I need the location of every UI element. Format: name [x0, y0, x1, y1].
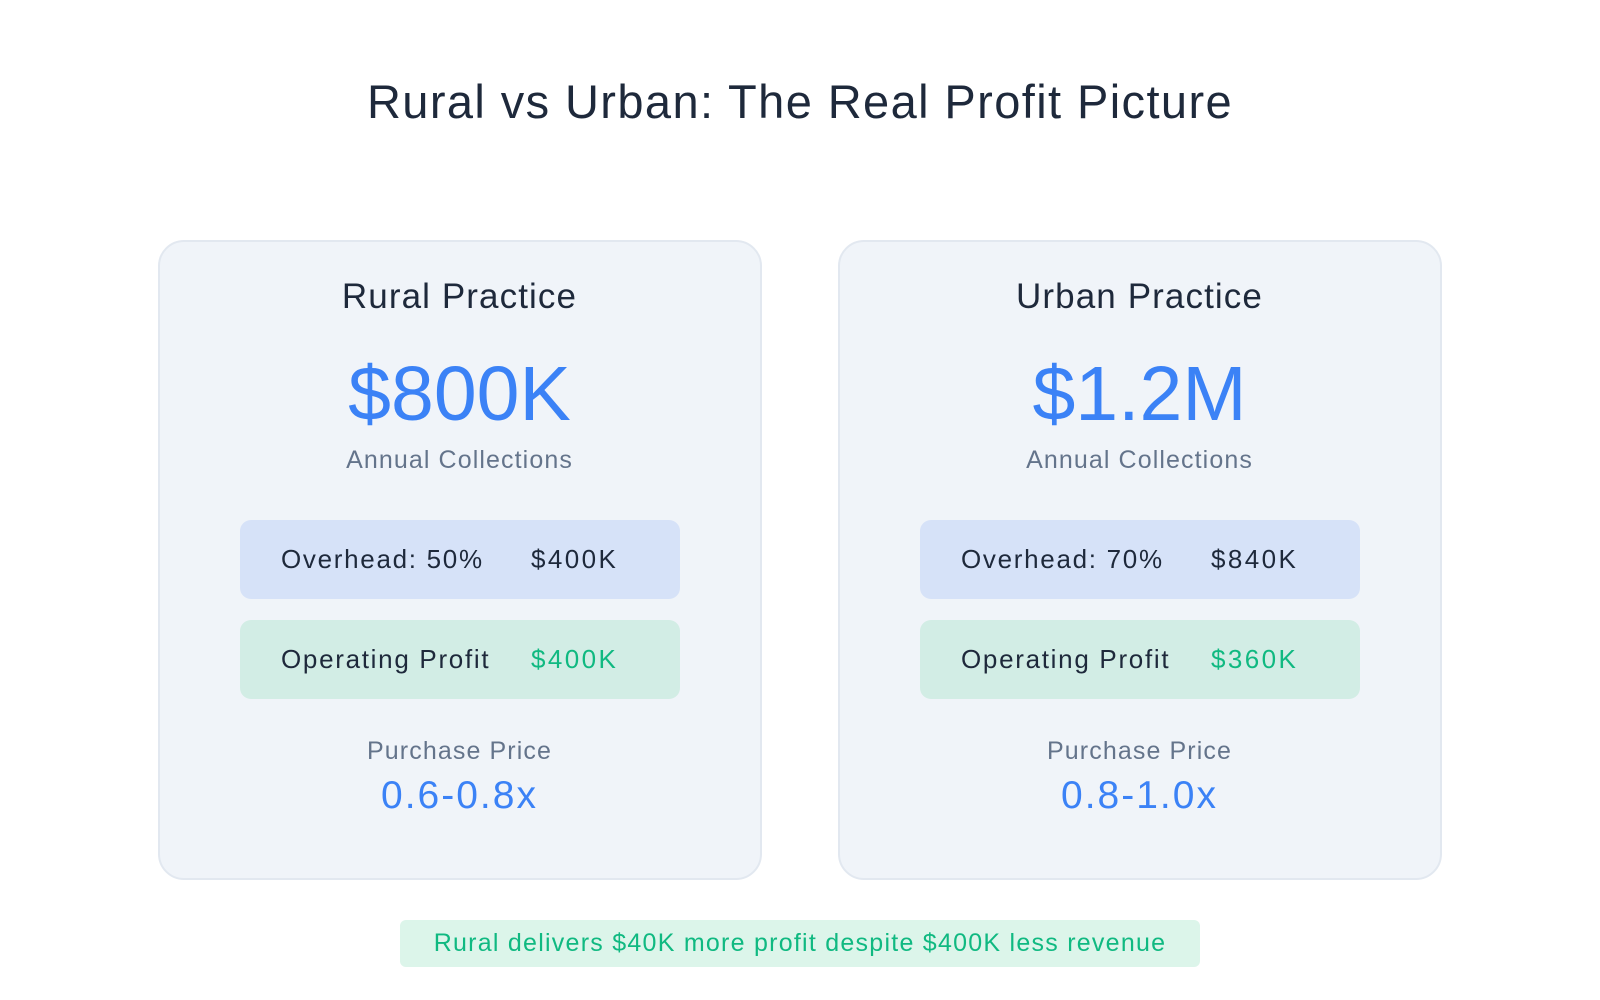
- urban collections label: Annual Collections: [1026, 446, 1253, 474]
- title: Rural vs Urban: The Real Profit Picture: [367, 75, 1233, 128]
- urban overhead row: $840K: [1211, 544, 1298, 574]
- panel: rural card: [158, 240, 762, 880]
- rural profit row: Operating Profit: [281, 644, 490, 674]
- rural overhead row: [240, 520, 680, 599]
- rural profit row: $400K: [531, 644, 618, 674]
- urban purchase multiple: 0.8-1.0x: [1061, 774, 1218, 817]
- rural purchase price label: Purchase Price: [367, 737, 552, 765]
- urban collections value: $1.2M: [1032, 351, 1246, 437]
- panel: urban card: [838, 240, 1442, 880]
- urban profit row: [920, 620, 1360, 699]
- heading: urban: Urban Practice: [1016, 277, 1263, 316]
- heading: rural: Rural Practice: [342, 277, 577, 316]
- urban overhead row: Overhead: 70%: [961, 544, 1164, 574]
- urban profit row: Operating Profit: [961, 644, 1170, 674]
- rural profit row: [240, 620, 680, 699]
- urban profit row: $360K: [1211, 644, 1298, 674]
- urban purchase price label: Purchase Price: [1047, 737, 1232, 765]
- callout: bottom banner: Rural delivers $40K more profit despite $400K less revenue: [434, 929, 1166, 957]
- urban overhead row: [920, 520, 1360, 599]
- rural collections label: Annual Collections: [346, 446, 573, 474]
- callout: bottom banner: [400, 920, 1200, 967]
- rural purchase multiple: 0.6-0.8x: [381, 774, 538, 817]
- rural overhead row: $400K: [531, 544, 618, 574]
- rural collections value: $800K: [348, 351, 571, 437]
- rural overhead row: Overhead: 50%: [281, 544, 484, 574]
